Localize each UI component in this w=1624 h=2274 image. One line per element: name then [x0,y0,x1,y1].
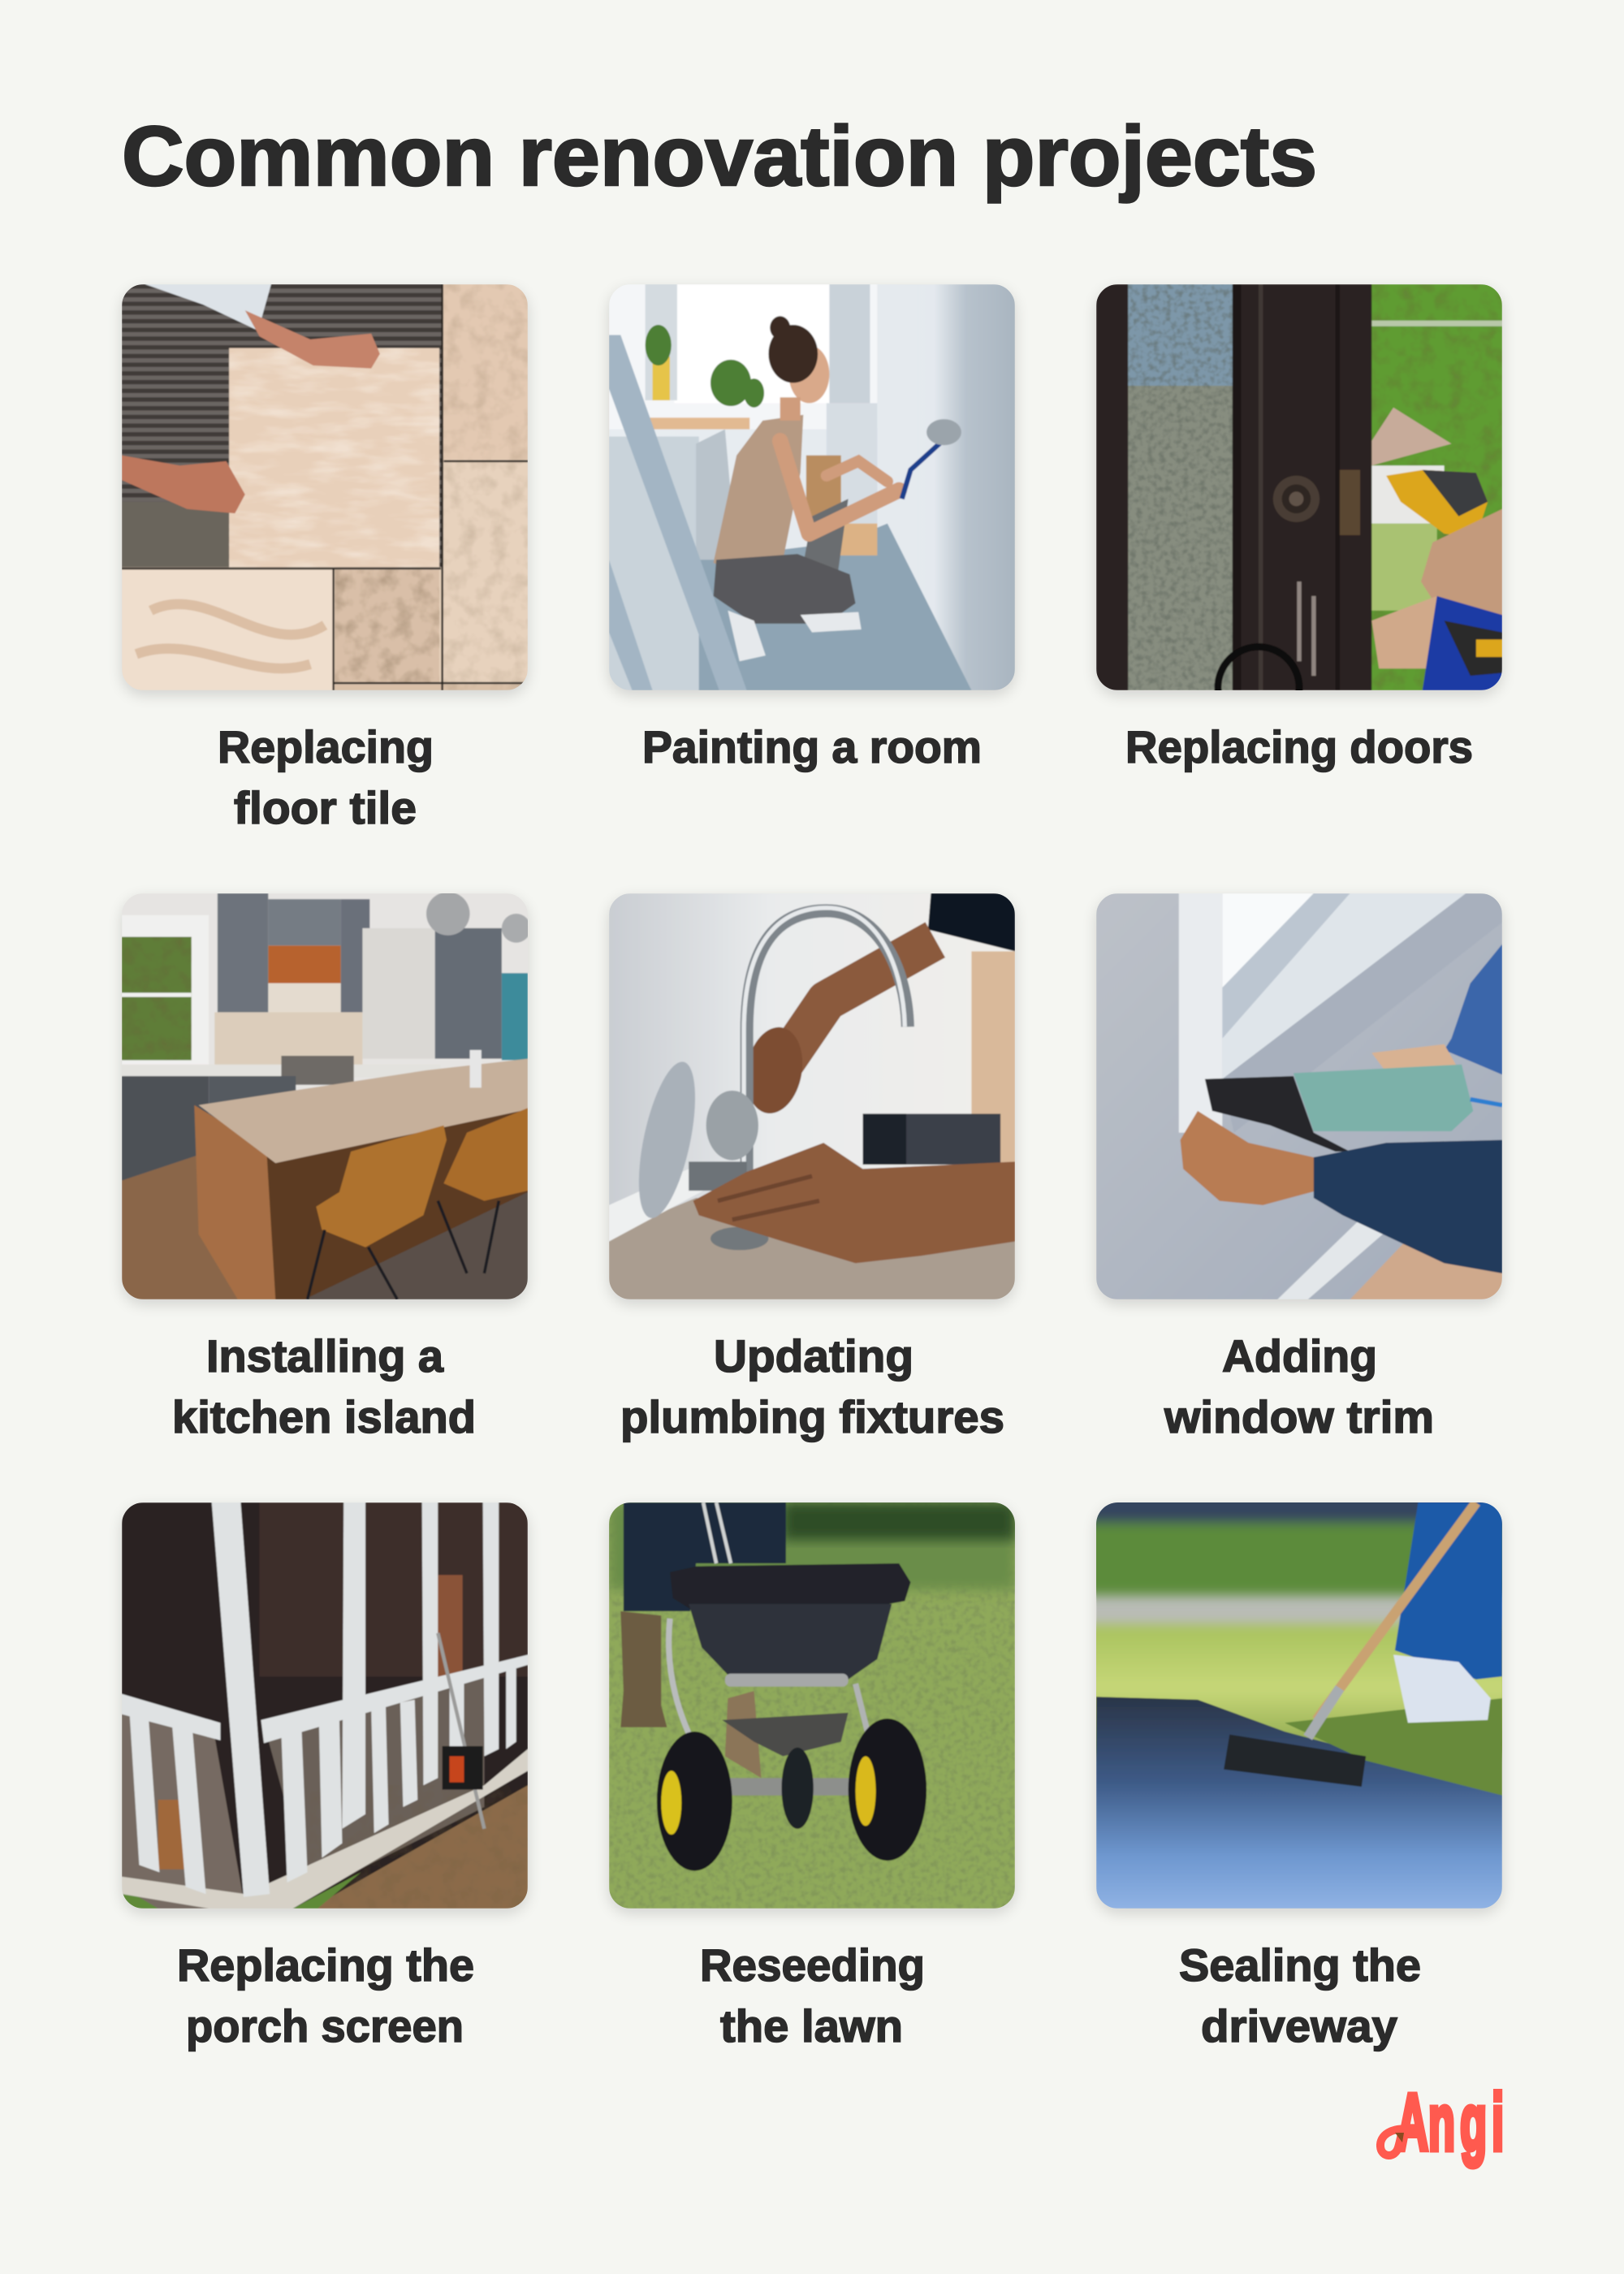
panel: painting a room [609,284,1015,772]
label [620,1330,1004,1442]
panel: sealing the driveway [1082,1488,1517,2051]
label [218,721,434,833]
label: kitchen island [172,1391,476,1442]
panel: replacing doors [1096,284,1502,772]
photo: kitchen with island [122,893,528,1299]
label: Installing a [206,1330,444,1381]
label: Sealing the [1179,1939,1421,1991]
photo: sealing a driveway with a squeegee [1096,1502,1502,1909]
label: Replacing the [177,1939,474,1991]
label: floor tile [234,782,417,833]
label: Replacing [218,721,434,772]
panel: replacing floor tile [122,284,528,833]
label [700,1939,925,2051]
title: Common renovation projects [122,110,1317,204]
photo: lawn seed spreader [609,1502,1015,1909]
label: Reseeding [700,1939,925,1991]
logo: Angi: Angi [1397,2077,1504,2167]
photo: hands fitting a faucet [609,893,1015,1299]
label [1164,1330,1434,1442]
photo: screened porch [122,1502,528,1909]
panel: adding window trim [1096,893,1502,1442]
label: porch screen [186,2000,464,2051]
label: plumbing fixtures [620,1391,1004,1442]
label: Painting a room [642,721,982,772]
panel: installing a kitchen island [122,892,531,1442]
label [1179,1939,1421,2051]
panel: replacing the porch screen [122,1502,528,2051]
photo: woman painting a wall [609,284,1015,690]
panel: reseeding the lawn [609,1502,1015,2051]
photo: drill on a door lock [1096,284,1502,690]
label: driveway [1201,2000,1397,2051]
photo: nailer on window trim [1096,893,1502,1299]
label [177,1939,474,2051]
photo: hands laying floor tile [122,284,528,690]
label: Adding [1222,1330,1377,1381]
label: the lawn [720,2000,903,2051]
label: Updating [714,1330,914,1381]
label: window trim [1164,1391,1434,1442]
label [172,1330,476,1442]
label: Replacing doors [1125,721,1473,772]
panel: updating plumbing fixtures [609,893,1015,1442]
